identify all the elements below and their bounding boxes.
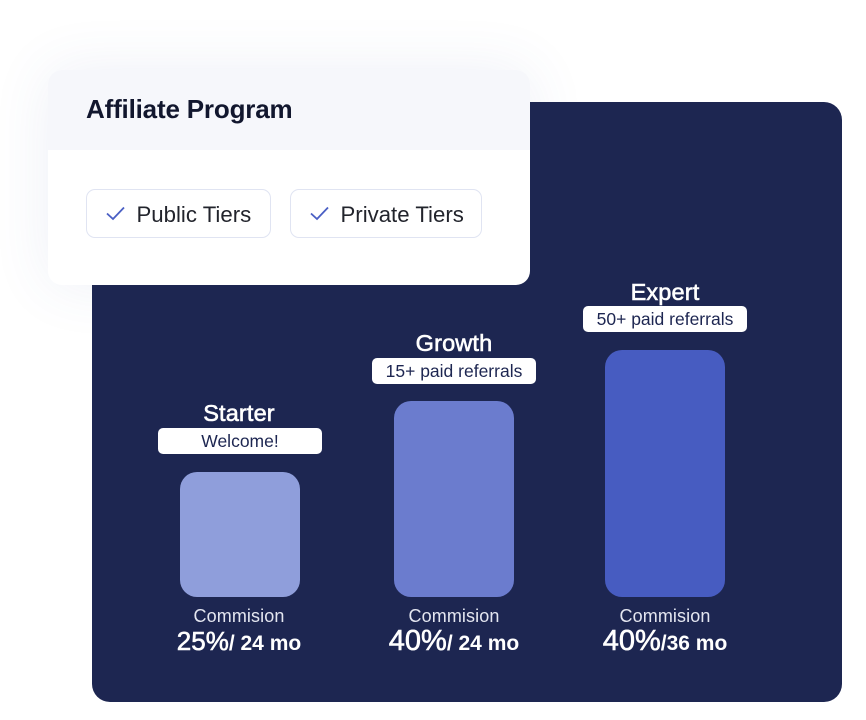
requirement pill	[372, 358, 536, 384]
chip: Public Tiers: Public Tiers	[136, 202, 251, 227]
tier name: Starter	[203, 400, 275, 426]
card header	[48, 70, 530, 150]
requirement pill: Welcome!	[201, 431, 279, 451]
tier: Growth	[372, 330, 536, 657]
icon: check	[106, 206, 125, 220]
chip: Private Tiers: Private Tiers	[340, 202, 464, 227]
tier name: Growth	[416, 330, 492, 356]
commission label: Commision	[194, 606, 284, 626]
requirement pill: 15+ paid referrals	[386, 361, 522, 381]
tier name: Expert	[631, 279, 699, 305]
tier: Expert	[583, 279, 747, 657]
commission value: 25%/ 24 mo	[177, 626, 301, 656]
bar	[605, 350, 725, 597]
chip: Private Tiers	[290, 189, 482, 238]
card shadow	[48, 70, 530, 285]
tier: Starter	[158, 400, 322, 656]
commission value: 40%/ 24 mo	[389, 625, 519, 657]
requirement pill	[583, 306, 747, 332]
requirement pill	[158, 428, 322, 454]
commission value: 40%/36 mo	[603, 625, 727, 657]
panel: dark tiers background	[92, 102, 842, 702]
panel: affiliate program card	[48, 70, 530, 285]
bar	[180, 472, 300, 597]
commission label: Commision	[409, 606, 499, 626]
commission label: Commision	[620, 606, 710, 626]
chip: Public Tiers	[86, 189, 271, 238]
bar	[394, 401, 514, 597]
icon: check	[310, 206, 329, 220]
heading: Affiliate Program: Affiliate Program	[86, 94, 292, 124]
requirement pill: 50+ paid referrals	[597, 309, 733, 329]
